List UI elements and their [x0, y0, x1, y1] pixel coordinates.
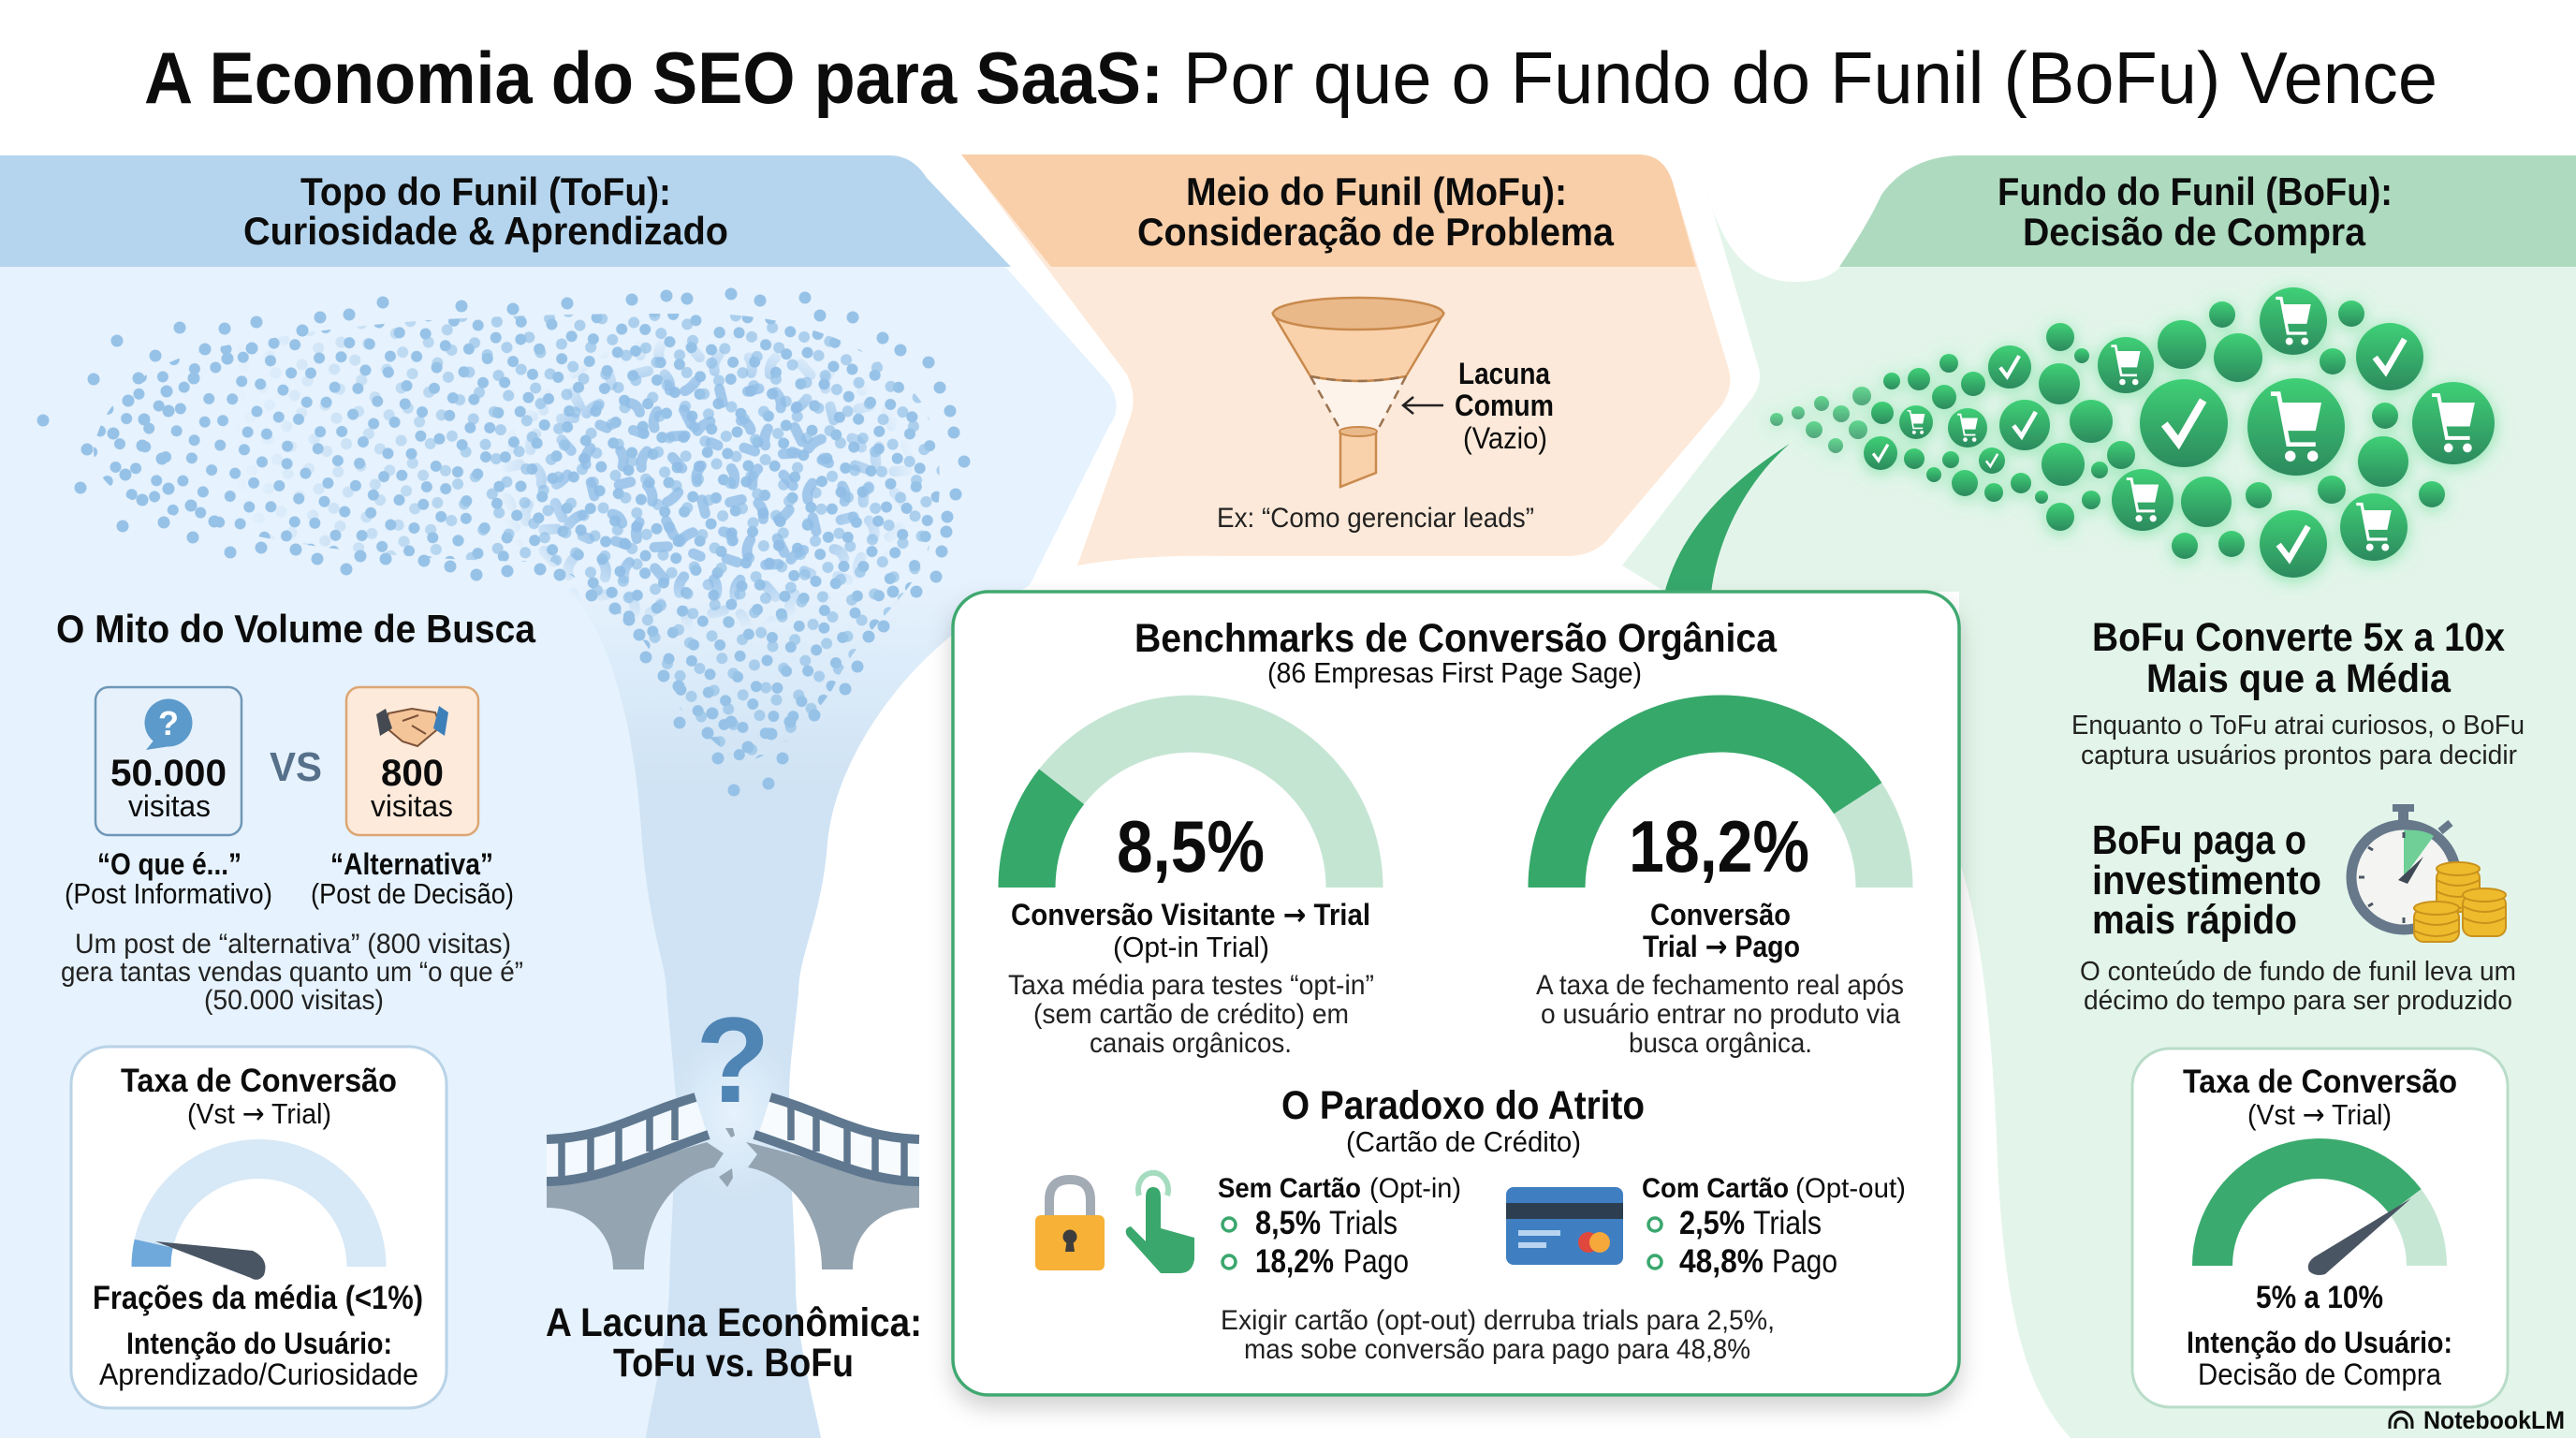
list: sem cartão: Pago — [1343, 1243, 1409, 1280]
panel: BoFu background — [1622, 155, 2576, 1438]
label: Lacuna Comum: Comum — [1455, 389, 1554, 422]
caption: post de decisão — [311, 847, 514, 910]
card: 50.000 visitas — [95, 687, 242, 835]
title: Por que o Fundo do Funil (BoFu) Vence — [1183, 37, 2437, 119]
BoFu heading: Fundo do Funil (BoFu): — [1998, 169, 2393, 213]
text: friction conclusion — [1221, 1305, 1775, 1365]
panel: ToFu conversion gauge: Frações da média (<1%) — [93, 1280, 423, 1316]
panel: MoFu background — [961, 154, 1730, 565]
text: friction conclusion: mas sobe conversão para pago para 48,8% — [1244, 1334, 1750, 1365]
text: BoFu explanation: captura usuários prontos para decidir — [2081, 741, 2517, 770]
coin stacks — [2414, 862, 2506, 942]
text block: visitor to trial: Conversão Visitante → Trial — [1011, 897, 1370, 932]
panel: BoFu conversion gauge: Taxa de Conversão — [2183, 1064, 2457, 1100]
label: VS: VS — [270, 744, 322, 790]
heading: O Paradoxo do Atrito: O Paradoxo do Atrito — [1281, 1083, 1645, 1128]
gauge: 18,2% — [1557, 724, 1884, 888]
heading: BoFu paga: investimento — [2092, 858, 2321, 903]
crack fragments — [719, 1128, 735, 1187]
panel: ToFu conversion gauge: (Vst → Trial) — [187, 1097, 331, 1131]
gauge: 18,2%: 18,2% — [1629, 805, 1809, 888]
list: sem cartão: Sem Cartão — [1218, 1173, 1361, 1204]
panel: BoFu conversion gauge: (Vst → Trial) — [2247, 1098, 2392, 1132]
text block: visitor to trial: Taxa média para testes “opt-in” — [1008, 970, 1374, 1001]
panel: BoFu conversion gauge: 5% a 10% — [2256, 1280, 2383, 1315]
MoFu heading: Consideração de Problema — [1137, 210, 1615, 254]
arrow: green curve to BoFu — [1664, 444, 1790, 594]
icon: funnel with missing middle — [1273, 298, 1443, 487]
MoFu heading — [1137, 169, 1615, 254]
text: production time — [2080, 957, 2516, 1016]
list: com cartão: (Opt-out) — [1795, 1173, 1906, 1204]
heading: BoFu converte: Mais que a Média — [2146, 656, 2452, 701]
text block: visitor to trial: (Opt-in Trial) — [1113, 931, 1269, 963]
icon: pointing hand — [1126, 1173, 1194, 1273]
MoFu header band — [961, 154, 1696, 267]
caption: post de decisão: (Post de Decisão) — [311, 877, 514, 910]
panel: ToFu conversion gauge: Taxa de Conversão — [121, 1063, 397, 1099]
label: Lacuna Comum: Lacuna — [1458, 357, 1550, 390]
text: BoFu explanation: Enquanto o ToFu atrai curiosos, o BoFu — [2071, 711, 2525, 741]
right bridge half — [746, 1097, 919, 1269]
label: Lacuna Comum: (Vazio) — [1463, 421, 1547, 455]
label: Lacuna Comum — [1455, 357, 1554, 455]
ToFu heading — [243, 169, 728, 253]
panel: BoFu conversion gauge: Intenção do Usuário: — [2187, 1326, 2452, 1359]
heading: A Lacuna Econômica: A Lacuna Econômica: — [546, 1300, 922, 1345]
text: MoFu example: Ex: “Como gerenciar leads” — [1217, 503, 1534, 534]
logo: NotebookLM: NotebookLM — [2423, 1406, 2565, 1434]
heading: O Mito do Volume de Busca: O Mito do Volume de Busca — [56, 607, 536, 651]
text block: visitor to trial: canais orgânicos. — [1090, 1028, 1292, 1059]
BoFu heading — [1998, 169, 2393, 254]
panel: ToFu conversion gauge — [71, 1047, 446, 1408]
heading: BoFu paga: BoFu paga o — [2092, 817, 2306, 863]
text block: trial to paid: A taxa de fechamento real após — [1536, 970, 1904, 1001]
icon: credit card — [1506, 1187, 1623, 1265]
icon: question speech bubble: ? — [158, 704, 179, 742]
panel: BoFu conversion gauge: Decisão de Compra — [2198, 1357, 2441, 1391]
text block: trial to paid: busca orgânica. — [1629, 1028, 1812, 1059]
list: sem cartão — [1218, 1173, 1461, 1280]
heading: O Paradoxo do Atrito: (Cartão de Crédito) — [1346, 1125, 1581, 1158]
text block: volume explanation: gera tantas vendas quanto um “o que é” — [61, 957, 523, 988]
BoFu header band — [1839, 155, 2576, 267]
list: sem cartão: 18,2% — [1255, 1243, 1334, 1280]
list: com cartão: Pago — [1772, 1243, 1837, 1280]
text block: trial to paid — [1536, 898, 1904, 1059]
heading: benchmarks — [1134, 616, 1778, 689]
icon: handshake — [376, 706, 448, 746]
text block: trial to paid: Conversão — [1650, 898, 1791, 932]
panel: benchmarks card — [953, 592, 1959, 1395]
heading: O Paradoxo do Atrito — [1281, 1083, 1645, 1158]
icon: padlock — [1035, 1180, 1105, 1270]
icon: broken bridge with question mark — [547, 991, 919, 1269]
list: com cartão: 2,5% — [1679, 1205, 1745, 1241]
panel: BoFu conversion gauge — [2132, 1049, 2508, 1407]
caption: post informativo: (Post Informativo) — [65, 877, 272, 910]
title: A Economia do SEO para SaaS: — [144, 37, 1164, 119]
caption: post de decisão: “Alternativa” — [330, 847, 493, 881]
icon: broken bridge with question mark: ? — [695, 991, 770, 1128]
list: com cartão: 48,8% — [1679, 1243, 1764, 1280]
card: 800 visitas — [346, 687, 478, 835]
heading: BoFu paga — [2092, 817, 2321, 943]
text block: volume explanation: Um post de “alternativa” (800 visitas) — [75, 929, 511, 960]
text block: trial to paid: Trial → Pago — [1643, 929, 1800, 964]
heading: A Lacuna Econômica: ToFu vs. BoFu — [613, 1341, 854, 1386]
title — [144, 37, 2437, 119]
list: sem cartão: Trials — [1329, 1205, 1398, 1241]
heading: benchmarks: (86 Empresas First Page Sage) — [1267, 656, 1642, 689]
list: com cartão: Com Cartão — [1642, 1173, 1789, 1204]
chart: particle cloud of ToFu visitors — [0, 281, 973, 805]
heading: BoFu converte — [2092, 615, 2505, 701]
arrow: pointing to the gap — [1403, 397, 1443, 414]
text block: volume explanation — [61, 929, 523, 1016]
list: com cartão — [1642, 1173, 1906, 1280]
card: 50.000 visitas: visitas — [128, 789, 211, 823]
MoFu heading: Meio do Funil (MoFu): — [1186, 169, 1567, 213]
gauge: 8,5% — [1027, 724, 1354, 888]
card: 800 visitas: 800 — [381, 753, 444, 794]
ToFu heading: Curiosidade & Aprendizado — [243, 209, 728, 253]
icon: stopwatch and coins — [2351, 804, 2506, 942]
gauge: below 1% — [152, 1159, 367, 1280]
panel: ToFu conversion gauge: Aprendizado/Curiosidade — [99, 1357, 418, 1391]
left bridge half — [547, 1097, 724, 1269]
list: com cartão: Trials — [1753, 1205, 1822, 1241]
text: BoFu explanation — [2071, 711, 2525, 770]
list: sem cartão: 8,5% — [1255, 1205, 1321, 1241]
text block: trial to paid: o usuário entrar no produto via — [1541, 999, 1900, 1030]
caption: post informativo — [65, 847, 272, 910]
card: 800 visitas: visitas — [371, 789, 453, 823]
chart: BoFu bubbles — [1770, 287, 2495, 578]
BoFu heading: Decisão de Compra — [2023, 210, 2366, 254]
ToFu header band — [0, 155, 1011, 267]
icon: question speech bubble — [144, 698, 193, 750]
ToFu heading: Topo do Funil (ToFu): — [300, 169, 671, 213]
text block: volume explanation: (50.000 visitas) — [204, 985, 384, 1016]
text block: visitor to trial — [1008, 897, 1374, 1059]
gauge: 5% a 10% — [2213, 1159, 2426, 1275]
ToFu funnel stream — [562, 580, 973, 1438]
text: production time: O conteúdo de fundo de funil leva um — [2080, 957, 2516, 987]
gauge: 8,5%: 8,5% — [1117, 805, 1265, 888]
list: sem cartão: (Opt-in) — [1369, 1173, 1461, 1204]
caption: post informativo: “O que é...” — [97, 847, 242, 881]
card: 50.000 visitas: 50.000 — [110, 753, 227, 794]
heading: benchmarks: Benchmarks de Conversão Orgânica — [1134, 616, 1778, 661]
panel: ToFu background — [0, 155, 1116, 1438]
panel: ToFu conversion gauge: Intenção do Usuário: — [126, 1327, 392, 1360]
text block: visitor to trial: (sem cartão de crédito) em — [1033, 999, 1349, 1030]
heading: BoFu converte: BoFu Converte 5x a 10x — [2092, 615, 2505, 660]
text: production time: décimo do tempo para ser produzido — [2084, 986, 2512, 1016]
heading: A Lacuna Econômica — [546, 1300, 922, 1386]
heading: BoFu paga: mais rápido — [2092, 897, 2297, 943]
text: friction conclusion: Exigir cartão (opt-out) derruba trials para 2,5%, — [1221, 1305, 1775, 1336]
